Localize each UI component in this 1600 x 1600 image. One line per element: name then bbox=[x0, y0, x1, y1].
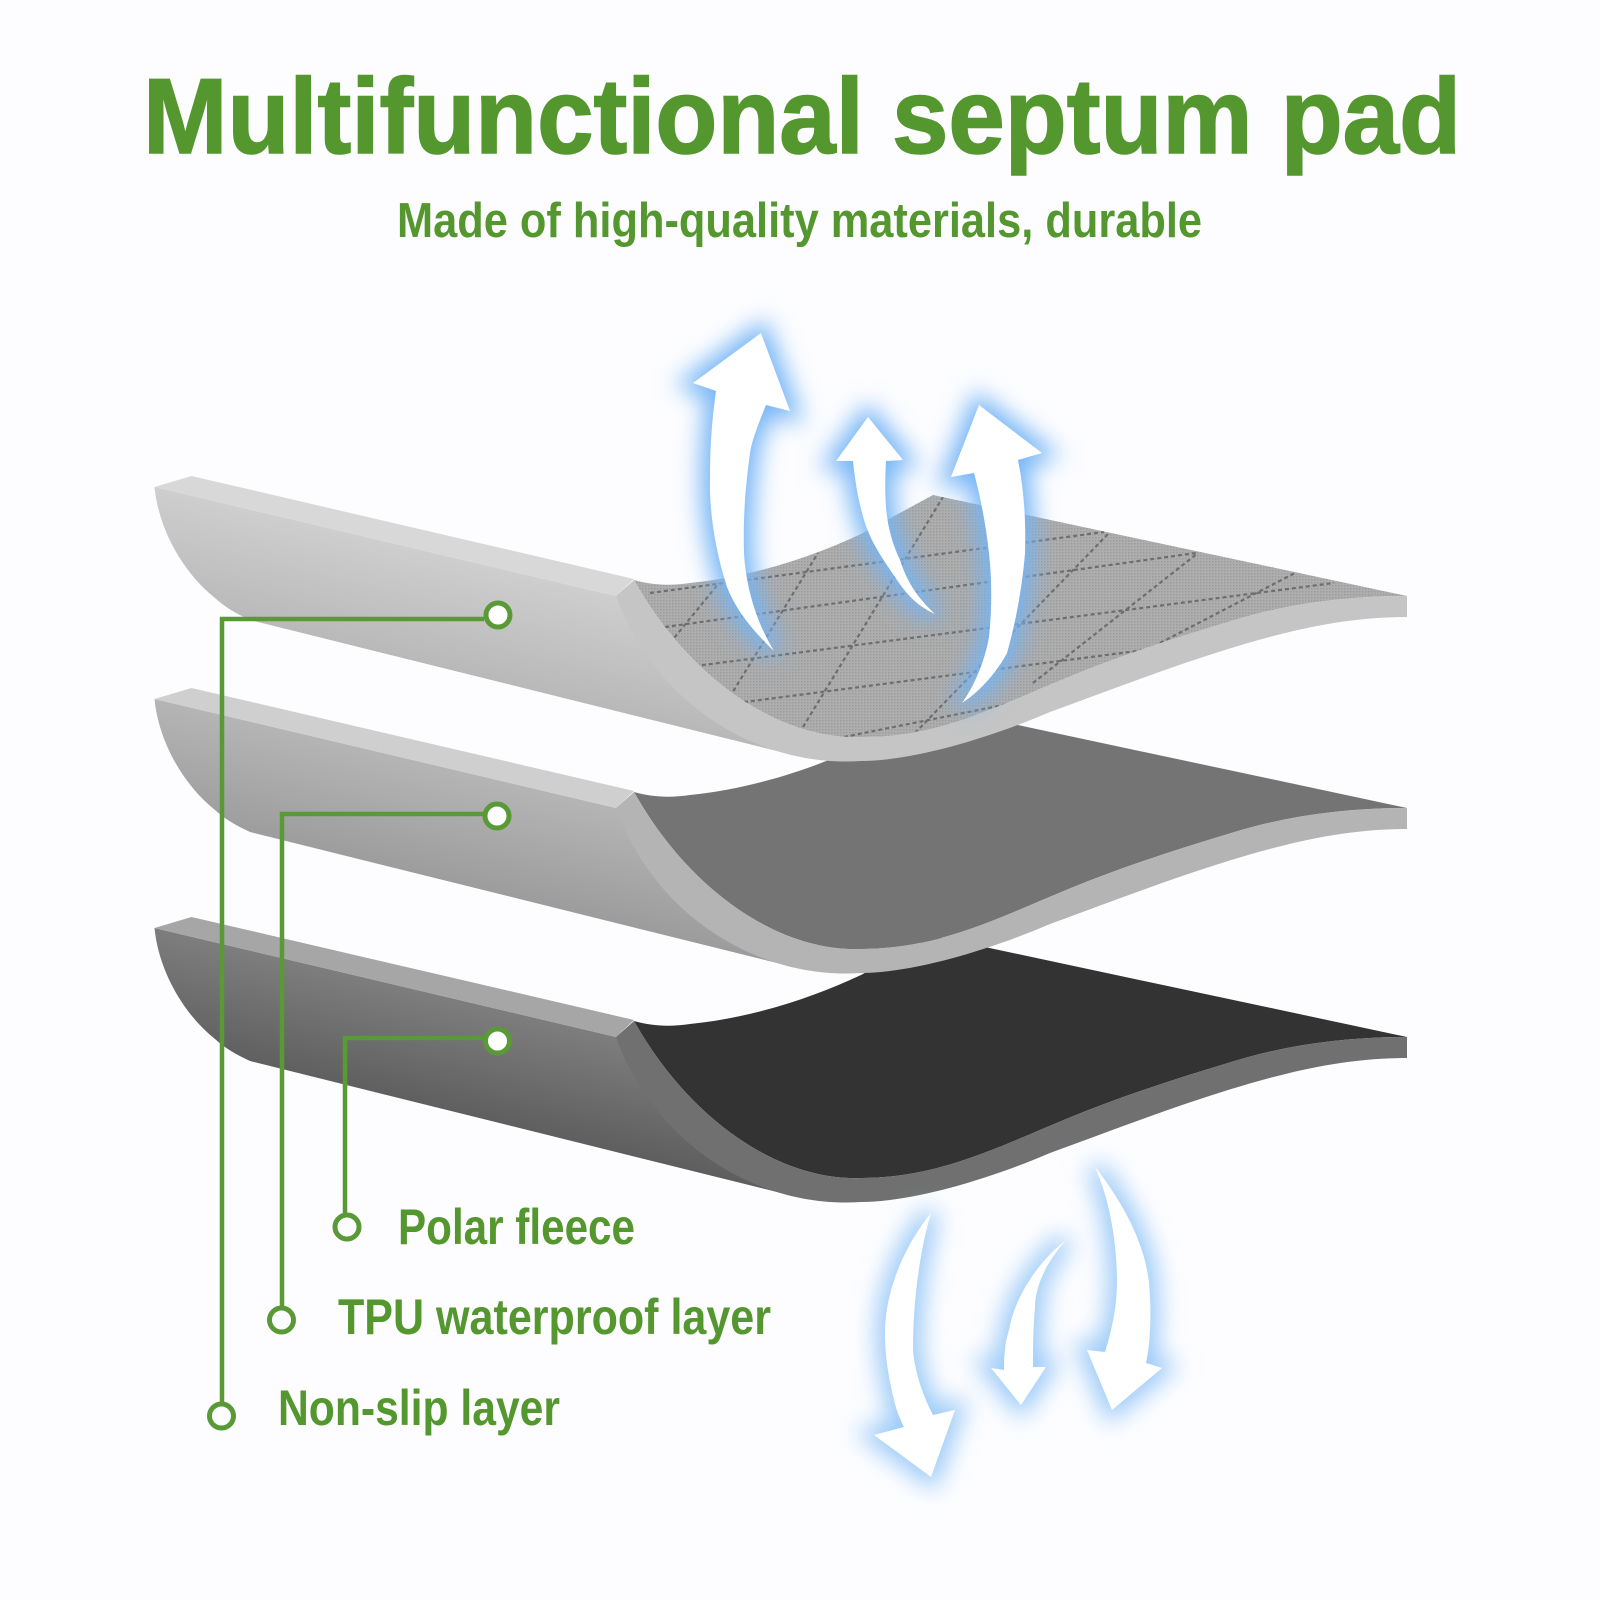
callout: non-slip layer connector bbox=[210, 603, 510, 1428]
label: non-slip layer: Non-slip layer bbox=[278, 1380, 560, 1436]
arrow: right down bbox=[1087, 1167, 1162, 1410]
sheet edge band bbox=[616, 580, 1407, 762]
subtitle: Made of high-quality materials, durable bbox=[397, 194, 1202, 248]
sheet surface bbox=[634, 936, 1407, 1178]
label: TPU waterproof layer: TPU waterproof layer bbox=[338, 1289, 771, 1345]
arrows: air flowing down below bottom layer bbox=[874, 1167, 1162, 1477]
sheet surface bbox=[634, 707, 1407, 949]
sheet top strip bbox=[154, 688, 634, 808]
layer: top quilted sheet bbox=[154, 476, 1420, 762]
arrow: small middle up bbox=[836, 417, 935, 614]
arrow: large left up bbox=[693, 333, 790, 651]
label: polar fleece: Polar fleece bbox=[398, 1199, 635, 1255]
sheet side wall bbox=[154, 928, 785, 1194]
quilted fabric surface bbox=[634, 495, 1406, 737]
title: Multifunctional septum pad bbox=[143, 56, 1461, 176]
sheet side wall bbox=[154, 487, 785, 753]
sheet top strip bbox=[154, 917, 634, 1037]
callout: TPU waterproof layer connector bbox=[270, 804, 509, 1332]
arrow: right up bbox=[951, 405, 1042, 703]
layer: bottom polar fleece dark sheet bbox=[154, 917, 1407, 1203]
sheet top strip bbox=[154, 476, 634, 596]
arrow: left down bbox=[874, 1213, 955, 1477]
layer: middle TPU sheet bbox=[154, 688, 1407, 974]
sheet side wall bbox=[154, 699, 785, 965]
arrows: air rising through top layer bbox=[693, 333, 1042, 703]
arrow: small middle down bbox=[991, 1240, 1066, 1405]
sheet edge band bbox=[616, 792, 1407, 974]
callout: polar fleece connector bbox=[335, 1029, 510, 1239]
sheet edge band bbox=[616, 1021, 1407, 1203]
